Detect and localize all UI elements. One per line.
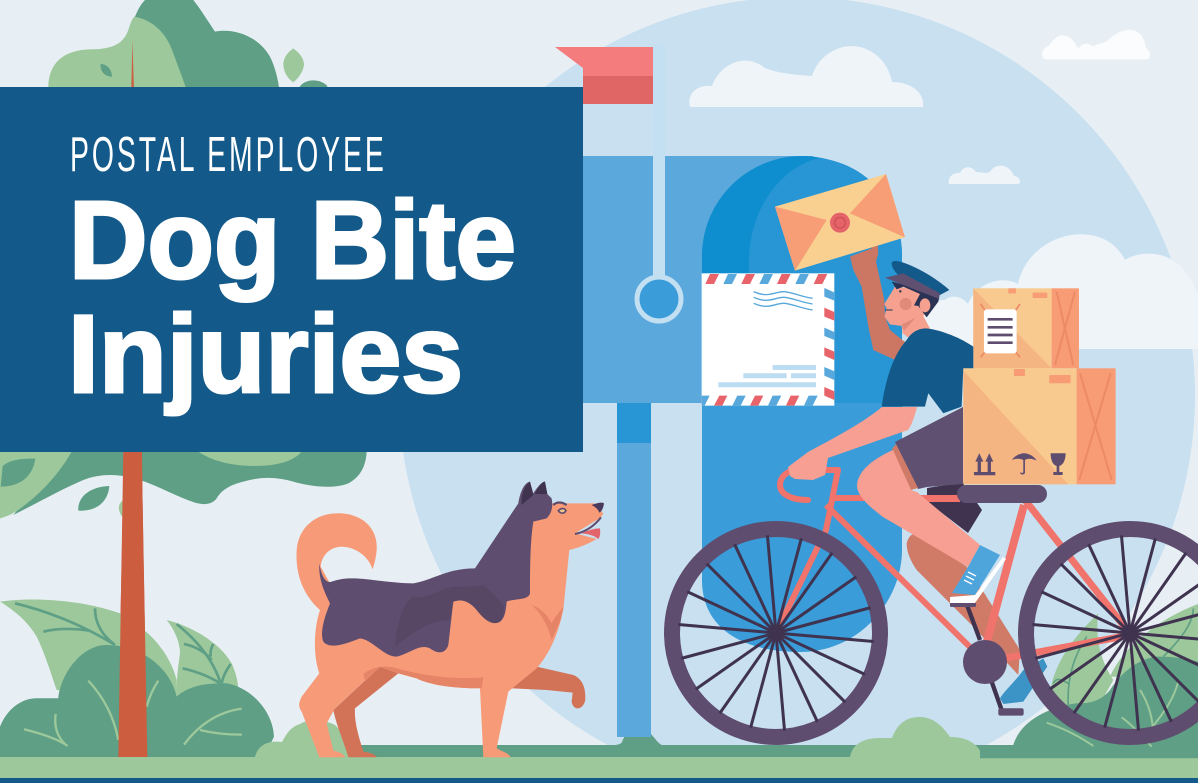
- bicycle and rider: [672, 236, 1198, 737]
- dog fur: [319, 482, 552, 657]
- handling icons: [974, 453, 1066, 475]
- bicycle frame: [776, 470, 1127, 662]
- tree canopy top: [48, 0, 327, 90]
- held envelope: [775, 174, 905, 271]
- tree canopy bottom: [0, 450, 367, 518]
- mailbox flag: [555, 47, 653, 104]
- dog nose and eye: [553, 502, 604, 513]
- dog far legs: [333, 667, 585, 757]
- rider cap: [885, 261, 949, 299]
- packages: [963, 288, 1116, 484]
- dog ears: [521, 482, 547, 505]
- rider forearm and hand: [788, 407, 917, 480]
- right bush: [980, 604, 1198, 758]
- rider front shoe: [950, 545, 1006, 603]
- dog body: [296, 503, 603, 757]
- rider front leg: [857, 450, 980, 567]
- dog belly shadow: [363, 667, 483, 688]
- mailbox: [555, 45, 902, 737]
- lower package: [963, 368, 1116, 484]
- front wheel: [672, 529, 880, 737]
- dog chest mark: [532, 605, 563, 640]
- seat: [957, 485, 1047, 503]
- dog: [296, 482, 604, 757]
- dog mouth and tongue: [575, 517, 601, 539]
- chainring: [963, 640, 1007, 684]
- rider neck shadow: [902, 317, 916, 331]
- small ground bushes: [255, 717, 983, 757]
- rider ear: [920, 298, 930, 312]
- title line one: Dog Bite: [69, 179, 516, 302]
- mailbox arch: [702, 156, 902, 405]
- title panel: [0, 87, 583, 452]
- title eyebrow: POSTAL EMPLOYEE: [70, 128, 387, 182]
- rear wheel: [1026, 529, 1198, 737]
- left bushes: [0, 450, 274, 757]
- upper package: [973, 288, 1079, 368]
- rider cheek, eye and mouth: [885, 285, 912, 310]
- envelope wax seal: [830, 213, 850, 233]
- rider shirt: [882, 328, 973, 413]
- tree trunk: [118, 452, 147, 757]
- mailbox lower body: [702, 403, 902, 652]
- mailbox post: [617, 403, 651, 737]
- rider neck and face: [884, 287, 937, 337]
- ground: [0, 745, 1198, 783]
- small leaf on trunk: [119, 498, 133, 522]
- tree: [0, 0, 367, 757]
- clouds: [689, 30, 1198, 349]
- rider hair: [892, 282, 940, 317]
- mailbox flag pole: [637, 45, 681, 321]
- rider back leg: [907, 533, 1047, 716]
- background circle: [399, 0, 1195, 783]
- dog fur shadow: [395, 585, 504, 647]
- mailbox flat body: [583, 156, 813, 403]
- rider raised arm: [850, 236, 907, 361]
- title line two: Injuries: [68, 293, 463, 416]
- rider shorts: [892, 407, 982, 533]
- rider head and raised arm: [850, 236, 949, 361]
- airmail envelope: [702, 273, 834, 406]
